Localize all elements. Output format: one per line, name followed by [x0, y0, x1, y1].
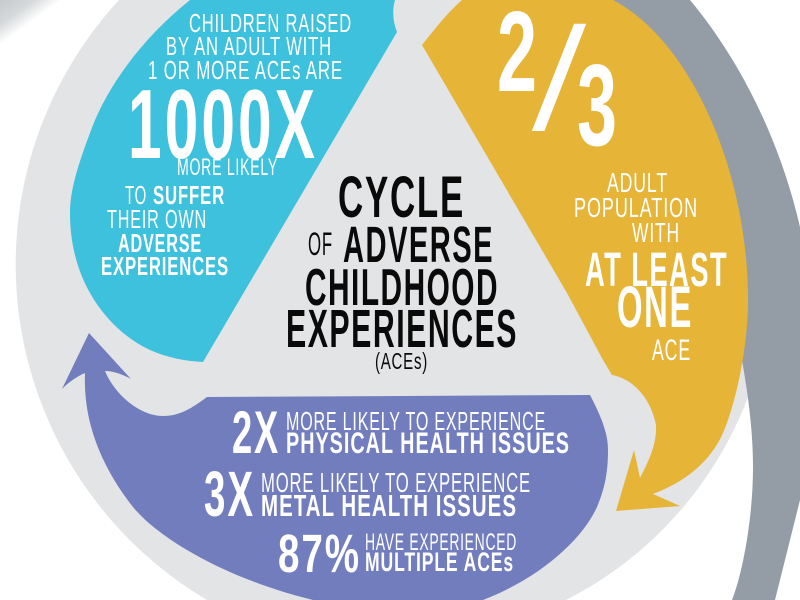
stat 3X — [204, 458, 531, 530]
gold text: POPULATION — [574, 192, 698, 223]
corner shadow — [0, 0, 62, 45]
center title: EXPERIENCES — [286, 299, 518, 359]
cyan intro text: CHILDREN RAISED — [189, 8, 352, 38]
fraction 2/3 — [497, 0, 617, 170]
cyan shape — [70, 0, 397, 362]
panel: lilac health risks — [62, 333, 608, 600]
gold text: ACE — [652, 334, 691, 367]
stat 3X: METAL HEALTH ISSUES — [261, 488, 517, 523]
center title — [286, 165, 518, 374]
gold text — [574, 167, 728, 367]
stat 3X: 3X — [204, 458, 255, 530]
panel: cyan 1000X — [70, 0, 397, 362]
lilac arrow shape — [62, 333, 608, 600]
gold text: ONE — [617, 275, 693, 340]
gold text: ADULT — [607, 167, 668, 198]
cyan closing text — [101, 180, 229, 281]
panel: gold two thirds — [422, 0, 748, 511]
cyan closing text: EXPERIENCES — [101, 251, 229, 281]
center title: ADVERSE — [343, 216, 494, 273]
stat 87%: HAVE EXPERIENCED — [365, 529, 517, 556]
stat 2X: 2X — [232, 399, 280, 466]
more likely text: MORE LIKELY — [177, 154, 278, 181]
stat 87%: MULTIPLE ACEs — [365, 547, 514, 577]
stat 2X: PHYSICAL HEALTH ISSUES — [286, 427, 570, 460]
center title: CHILDHOOD — [305, 259, 499, 317]
1000X statistic: 1000X — [128, 69, 318, 179]
center title: (ACEs) — [375, 348, 428, 374]
fraction 2/3: 3 — [577, 40, 617, 170]
cyan closing text: SUFFER — [153, 180, 225, 210]
gold text: WITH — [632, 217, 680, 248]
center title: CYCLE — [338, 165, 465, 230]
fraction 2/3: / — [529, 0, 589, 163]
stat 87%: 87% — [278, 524, 361, 584]
stat 2X: MORE LIKELY TO EXPERIENCE — [286, 406, 546, 436]
cyan closing text: THEIR OWN — [107, 204, 207, 234]
center title: OF — [308, 226, 333, 262]
stat 87% — [278, 524, 517, 584]
cyan intro text: BY AN ADULT WITH — [166, 31, 332, 61]
stat 2X — [232, 399, 570, 466]
gold arrow shape — [422, 0, 748, 511]
stat 3X: MORE LIKELY TO EXPERIENCE — [261, 467, 531, 498]
cyan intro text — [148, 8, 352, 85]
grey circular arrow band — [613, 0, 800, 600]
cyan intro text: 1 OR MORE ACEs ARE — [148, 55, 343, 85]
cyan closing text: TO — [125, 180, 147, 210]
cyan closing text: ADVERSE — [118, 228, 202, 258]
